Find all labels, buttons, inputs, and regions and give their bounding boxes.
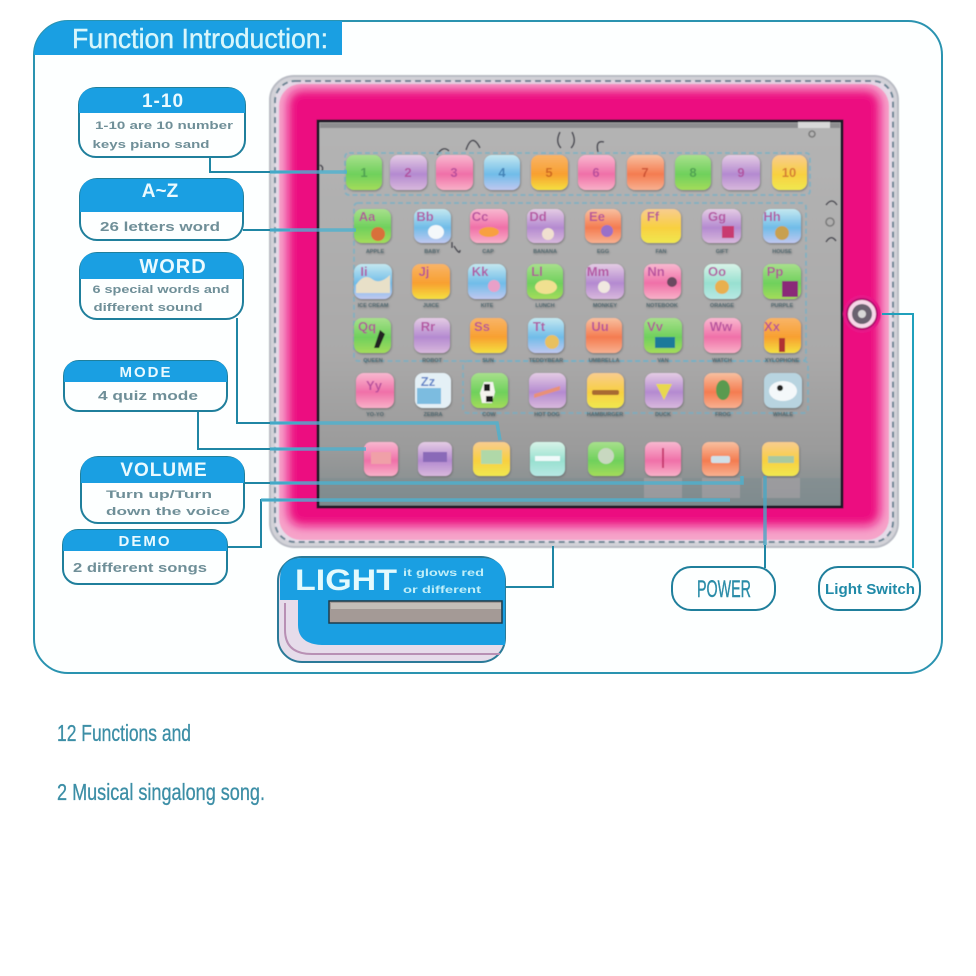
callout: MODE: MODE — [120, 364, 172, 381]
keys row 3: letters I-P: Mm — [587, 264, 609, 279]
callout: LIGHT — [278, 557, 505, 662]
keys row 1: numbers 1-10: 1 — [360, 165, 368, 180]
keys row 3: letters I-P — [354, 264, 801, 309]
keys row 1: numbers 1-10: 9 — [737, 165, 745, 180]
keys row 2: letters A-H: BABY — [424, 249, 440, 255]
keys row 1: numbers 1-10: 6 — [592, 165, 600, 180]
callout: WORD: 6 special words and — [92, 284, 230, 296]
keys row 1: numbers 1-10 — [346, 155, 807, 190]
keys row 3: letters I-P: MONKEY — [593, 303, 617, 309]
callout: LIGHT: it glows red — [403, 568, 484, 579]
keys row 5: letters Y-Z and six special words: DUCK — [655, 412, 671, 418]
callout: Light Switch: Light Switch — [825, 581, 915, 598]
keys row 3: letters I-P: Ii — [360, 264, 368, 279]
keys row 5: letters Y-Z and six special words — [356, 373, 802, 418]
keys row 1: numbers 1-10: 3 — [450, 165, 458, 180]
keys row 2: letters A-H: BANANA — [533, 249, 557, 255]
keys row 3: letters I-P: Pp — [767, 264, 783, 279]
callout: VOLUME: down the voice — [106, 506, 230, 518]
callout: DEMO: DEMO — [118, 533, 172, 550]
keys row 4: letters Q-X: SUN — [482, 358, 494, 364]
callout: DEMO: 2 different songs — [73, 560, 207, 575]
keys row 3: letters I-P: KITE — [481, 303, 494, 309]
keys row 4: letters Q-X: VAN — [657, 358, 669, 364]
callout: DEMO — [63, 530, 227, 584]
keys row 2: letters A-H: Ff — [647, 209, 660, 224]
keys row 4: letters Q-X: Uu — [591, 319, 609, 334]
callout: 1-10: keys piano sand — [92, 139, 210, 151]
keys row 4: letters Q-X: WATCH — [712, 358, 732, 364]
tablet illustration — [270, 76, 898, 547]
keys row 5: letters Y-Z and six special words: FROG — [715, 412, 731, 418]
keys row 3: letters I-P: Nn — [647, 264, 665, 279]
callout: A~Z: A~Z — [142, 181, 179, 202]
callout: WORD: different sound — [94, 302, 202, 314]
keys row 5: letters Y-Z and six special words: WHALE — [773, 412, 793, 418]
keys row 3: letters I-P: ORANGE — [710, 303, 734, 309]
keys row 1: numbers 1-10: 10 — [782, 165, 796, 180]
callout: VOLUME: Turn up/Turn — [106, 489, 212, 501]
callout: VOLUME: VOLUME — [120, 460, 208, 481]
tablet: screen — [318, 121, 842, 507]
keys row 1: numbers 1-10: 7 — [641, 165, 649, 180]
keys row 2: letters A-H: GIFT — [716, 249, 729, 255]
screen: water drops — [320, 131, 837, 252]
callout: WORD — [80, 253, 243, 319]
keys row 3: letters I-P: Jj — [419, 264, 429, 279]
keys row 4: letters Q-X: XYLOPHONE — [765, 358, 800, 364]
callout: POWER — [672, 567, 775, 610]
keys row 2: letters A-H — [354, 209, 801, 255]
keys row 4: letters Q-X — [354, 318, 801, 364]
callout: Light Switch — [819, 567, 920, 610]
screen: glass reflection at bottom — [320, 478, 840, 505]
heading tab: Function Introduction: Function Introduction: — [72, 23, 328, 54]
callout: 1-10: 1-10 — [142, 91, 184, 112]
screen: status bar — [320, 122, 840, 128]
keys row 2: letters A-H: Aa — [359, 209, 376, 224]
keys row 4: letters Q-X: TEDDYBEAR — [529, 358, 563, 364]
callout: POWER: POWER — [697, 576, 751, 603]
keys row 5: letters Y-Z and six special words: COW — [482, 412, 497, 418]
tablet: stitched edge — [275, 81, 893, 542]
keys row 5: letters Y-Z and six special words: HAMBURGER — [587, 412, 623, 418]
keys row 2: letters A-H: FAN — [656, 249, 667, 255]
keys row 5: letters Y-Z and six special words: ZEBRA — [424, 412, 442, 418]
keys row 4: letters Q-X: QUEEN — [363, 358, 383, 364]
text block: 2 Musical singalong song: 2 Musical singalong song. — [57, 779, 265, 805]
keys row 3: letters I-P: Kk — [472, 264, 489, 279]
keys row 2: letters A-H: CAP — [482, 249, 494, 255]
callout: 1-10 — [79, 88, 245, 157]
keys row 3: letters I-P: Oo — [708, 264, 726, 279]
callout: MODE: 4 quiz mode — [98, 388, 198, 403]
keys row 3: letters I-P: LUNCH — [535, 303, 555, 309]
keys row 2: letters A-H: Gg — [708, 209, 726, 224]
keys row 4: letters Q-X: Tt — [533, 319, 546, 334]
keys row 3: letters I-P: Ll — [531, 264, 543, 279]
keys row 6: function keys — [364, 442, 799, 476]
keys row 4: letters Q-X: Xx — [764, 319, 781, 334]
leader lines — [198, 156, 913, 587]
keys row 4: letters Q-X: Rr — [421, 319, 435, 334]
keys row 2: letters A-H: Hh — [763, 209, 781, 224]
callout: A~Z — [80, 179, 243, 240]
keys row 4: letters Q-X: UMBRELLA — [589, 358, 619, 364]
light switch button — [843, 295, 881, 333]
keys row 5: letters Y-Z and six special words: Zz — [421, 374, 436, 389]
callout: MODE — [64, 361, 227, 411]
keys row 2: letters A-H: Dd — [529, 209, 547, 224]
keys row 1: numbers 1-10: 2 — [404, 165, 412, 180]
keys row 1: numbers 1-10: 4 — [498, 165, 506, 180]
keys row 2: letters A-H: APPLE — [366, 249, 384, 255]
panel: function introduction frame — [34, 21, 942, 673]
keys row 5: letters Y-Z and six special words: HOT DOG — [534, 412, 560, 418]
keys row 4: letters Q-X: Ss — [474, 319, 490, 334]
callout: WORD: WORD — [139, 256, 207, 278]
keys row 1: numbers 1-10: 5 — [545, 165, 553, 180]
keys row 4: letters Q-X: ROBOT — [422, 358, 443, 364]
keys row 3: letters I-P: NOTEBOOK — [646, 303, 678, 309]
callout: A~Z: 26 letters word — [100, 219, 220, 234]
callout: 1-10: 1-10 are 10 number — [95, 120, 234, 132]
keys row 2: letters A-H: Ee — [589, 209, 605, 224]
keys row 5: letters Y-Z and six special words: YO-YO — [366, 412, 385, 418]
keys row 4: letters Q-X: Ww — [710, 319, 733, 334]
keys row 3: letters I-P: ICE CREAM — [358, 303, 389, 309]
keys row 2: letters A-H: EGG — [597, 249, 609, 255]
keys row 4: letters Q-X: Vv — [647, 319, 664, 334]
keys row 2: letters A-H: Cc — [472, 209, 488, 224]
callout: LIGHT: LIGHT — [295, 564, 397, 597]
keys row 2: letters A-H: Bb — [416, 209, 434, 224]
screen: dashed key groups — [345, 153, 810, 413]
keys row 4: letters Q-X: Qq — [358, 319, 376, 334]
keys row 2: letters A-H: HOUSE — [772, 249, 792, 255]
keys row 3: letters I-P: JUICE — [423, 303, 439, 309]
tablet: silver casing — [270, 76, 898, 547]
callout: LIGHT: or different — [403, 585, 482, 596]
keys row 5: letters Y-Z and six special words: Yy — [366, 378, 383, 393]
keys row 1: numbers 1-10: 8 — [689, 165, 697, 180]
callout: VOLUME — [81, 457, 244, 523]
tablet: pink frame — [279, 84, 889, 540]
keys row 3: letters I-P: PURPLE — [771, 303, 793, 309]
screen: key reflections — [644, 478, 800, 498]
text block: 12 Functions: 12 Functions and — [57, 720, 191, 746]
